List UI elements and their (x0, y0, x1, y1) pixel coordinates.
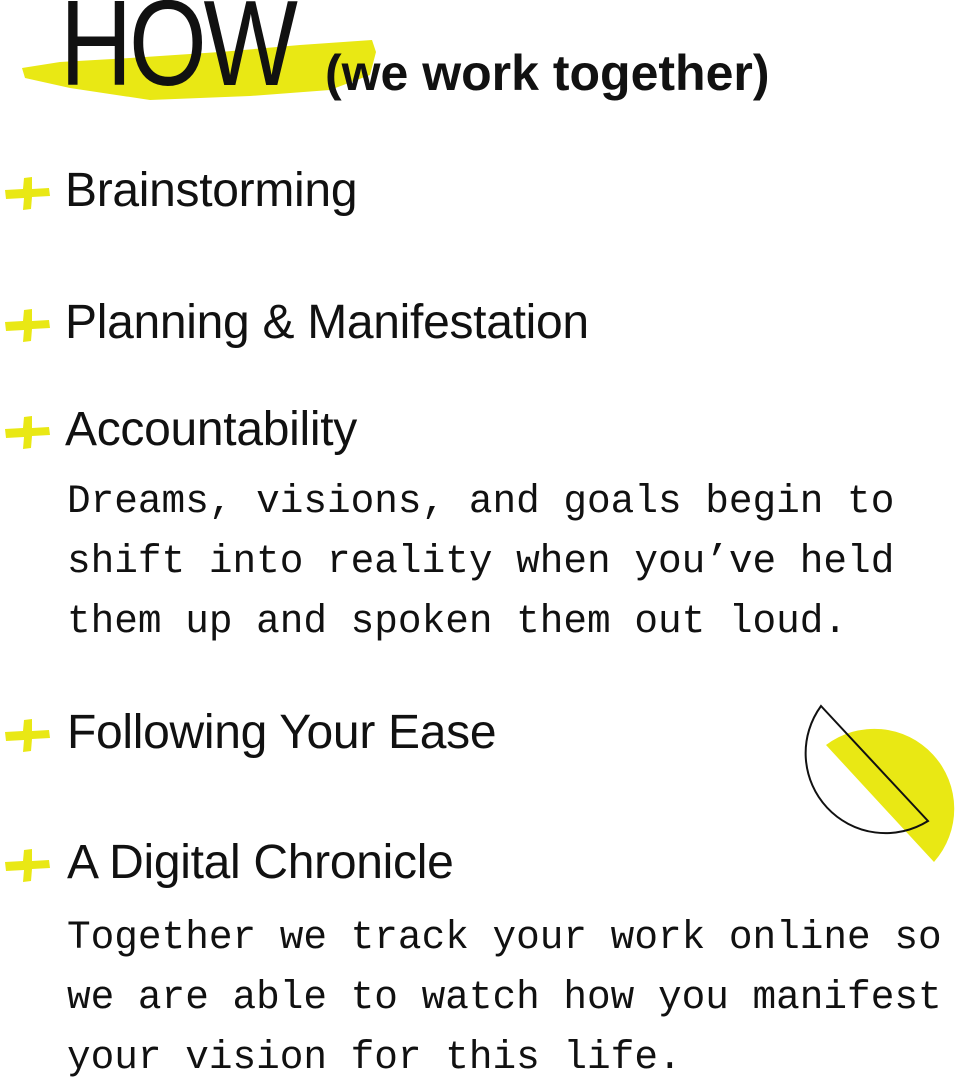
item: Planning: Planning & Manifestation (65, 296, 589, 349)
text block: them up and spoken them out loud. (67, 599, 847, 644)
item: A Digital Chronicle (5, 836, 942, 1080)
icon: plus (5, 719, 50, 752)
text block (67, 915, 942, 1080)
item: Accountability: Accountability (65, 403, 357, 456)
text block (67, 479, 894, 644)
title: (we work together) (325, 45, 769, 101)
icon: plus (5, 849, 50, 882)
text block: Dreams, visions, and goals begin to (67, 479, 894, 524)
icon: plus (5, 416, 50, 449)
item: Accountability (5, 403, 894, 644)
text block: shift into reality when you’ve held (67, 539, 894, 584)
title (60, 0, 769, 111)
item: Following Your Ease: Following Your Ease (67, 706, 496, 759)
icon: plus (5, 177, 50, 210)
text block: your vision for this life. (67, 1035, 682, 1080)
text block: we are able to watch how you manifest (67, 975, 942, 1020)
item: A Digital Chronicle: A Digital Chronicle (67, 836, 453, 889)
text block: Together we track your work online so (67, 915, 942, 960)
yellow brush stroke (22, 40, 376, 100)
icon: plus (5, 309, 50, 342)
decorative semicircles (804, 704, 954, 862)
item: Brainstorming: Brainstorming (65, 164, 357, 217)
